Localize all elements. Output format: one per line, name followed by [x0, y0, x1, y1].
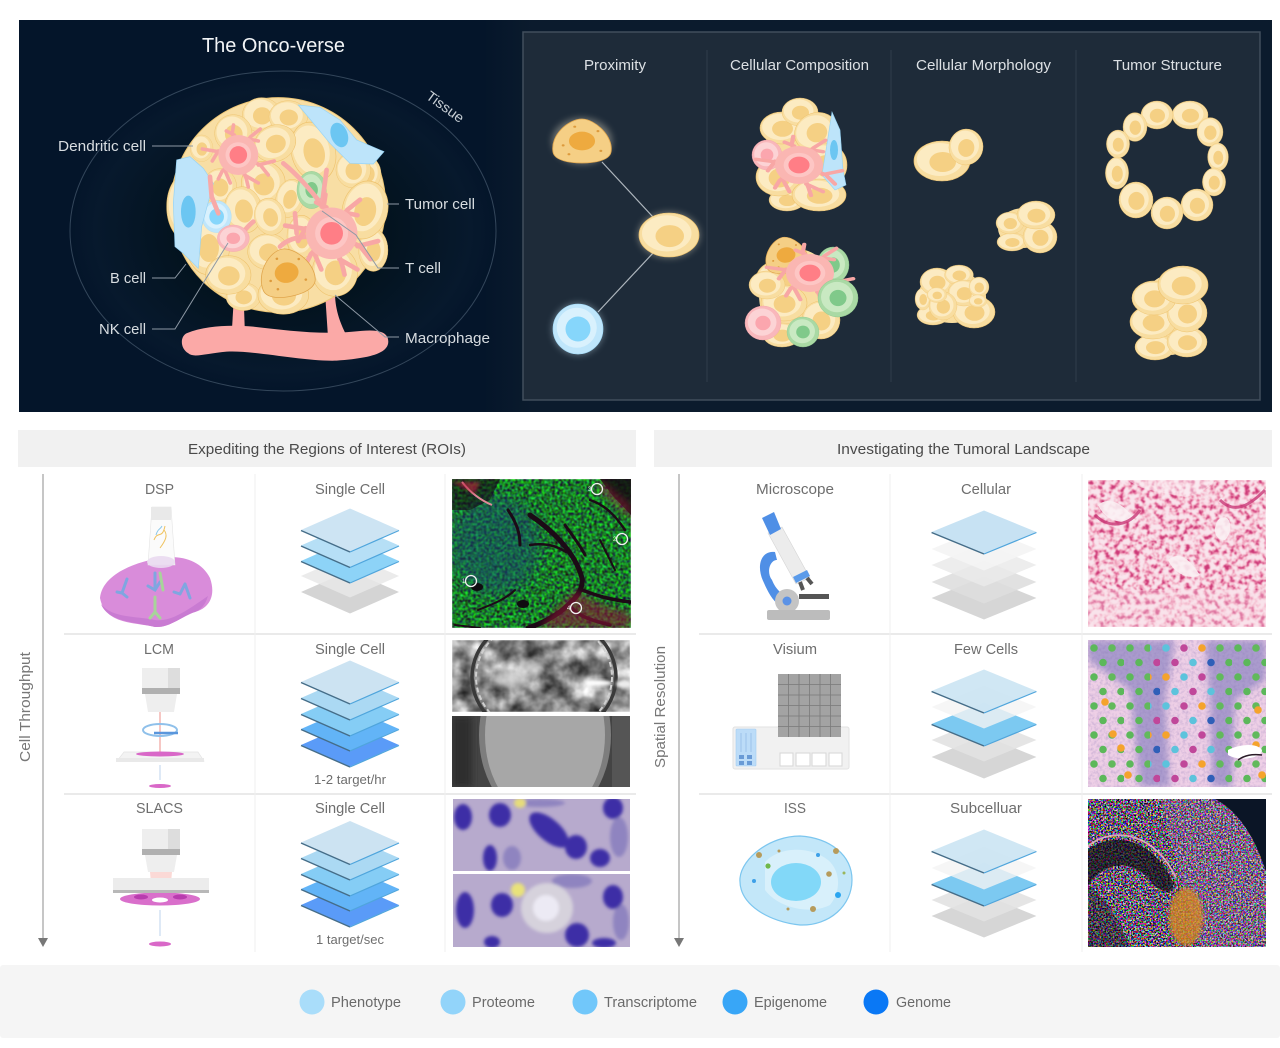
panel: spatial features: [523, 32, 1260, 400]
image: SLACS before: [453, 797, 630, 871]
section heading: landscape: Investigating the Tumoral Landscape: [837, 441, 1090, 458]
legend: genome: Genome: [896, 994, 951, 1011]
feature headings: Proximity: [584, 58, 647, 74]
column labels: 1 target/sec: [316, 932, 384, 947]
icon: LCM instrument: [116, 668, 204, 788]
illustration: tumor with blood vessel: [167, 98, 394, 361]
layer stack: Few Cells: [932, 670, 1036, 778]
column labels: SLACS: [136, 801, 183, 817]
column labels: Single Cell: [315, 642, 385, 658]
column labels: [136, 482, 1022, 947]
feature headings: Cellular Composition: [730, 58, 869, 74]
column labels: Cellular: [961, 482, 1011, 498]
column labels: Single Cell: [315, 801, 385, 817]
layer stack: DSP: [301, 508, 399, 614]
fibroblasts: [173, 105, 384, 268]
column labels: 1-2 target/hr: [314, 772, 387, 787]
cell labels: [58, 138, 490, 347]
image: ISS spatial map: [1088, 799, 1266, 947]
cell labels: Tumor cell: [405, 196, 475, 213]
tissue label: Tissue: [423, 87, 468, 126]
cellular composition cluster 2: [745, 234, 858, 347]
connecting tentacles: [210, 163, 327, 247]
tumor structure ring: [1105, 101, 1228, 229]
panel: The Onco-verse dark banner: [19, 20, 1272, 412]
column labels: Visium: [773, 642, 817, 658]
tumor structure cluster: [1130, 266, 1208, 360]
title: The Onco-verse: [202, 35, 345, 57]
section heading: landscape: [654, 430, 1272, 467]
image: DSP fluorescence: 1: [462, 579, 466, 585]
legend: transcriptome: [572, 990, 697, 1014]
legend: epigenome: [722, 990, 827, 1014]
fibroblast nuclei: [181, 120, 351, 228]
dendritic cell 2: [285, 195, 378, 275]
cell labels: Macrophage: [405, 330, 490, 347]
feature headings: [584, 58, 1222, 74]
NK cell: [217, 225, 249, 252]
legend: phenotype: Phenotype: [331, 994, 401, 1011]
layer stack: Subcellular: [932, 830, 1036, 938]
legend: genome: [864, 990, 951, 1014]
macrophage: [255, 244, 318, 302]
cellular morphology clusters: [914, 126, 1057, 328]
icon: DSP tissue and probe: [100, 507, 212, 627]
icon: Visium instrument: [733, 674, 849, 769]
column labels: Subcelluar: [950, 801, 1022, 817]
column labels: DSP: [145, 482, 174, 498]
icon: ISS cell: [740, 836, 852, 925]
feature headings: Cellular Morphology: [916, 58, 1052, 74]
image: DSP fluorescence: 3: [588, 487, 592, 493]
cell labels: B cell: [110, 270, 146, 287]
column labels: Microscope: [756, 482, 834, 498]
legend: epigenome: Epigenome: [754, 994, 827, 1011]
legend: proteome: [440, 990, 535, 1014]
column labels: LCM: [144, 642, 174, 658]
layer stack: SLACS: [301, 821, 399, 927]
image: H&E stain: [1088, 480, 1266, 627]
dendritic cell 1: [202, 125, 274, 187]
proximity diagram: [552, 118, 700, 355]
legend: proteome: Proteome: [472, 994, 535, 1011]
leader lines: [152, 146, 399, 337]
image: DSP fluorescence: 4: [567, 606, 571, 612]
cell labels: Dendritic cell: [58, 138, 146, 155]
image: LCM after: [452, 716, 630, 787]
image: LCM before: [452, 640, 630, 712]
icon: microscope: [760, 512, 830, 620]
axis: cell throughput: Cell Throughput: [18, 652, 34, 762]
B cell: [202, 201, 231, 233]
cell labels: T cell: [405, 260, 441, 277]
axis: spatial resolution: Spatial Resolution: [653, 646, 669, 768]
cell labels: NK cell: [99, 321, 146, 338]
column labels: Few Cells: [954, 642, 1018, 658]
legend: [0, 965, 1280, 1038]
tissue oval: [70, 71, 496, 391]
cellular composition cluster 1: [752, 98, 847, 211]
column labels: ISS: [784, 801, 806, 817]
tumor cell mass: [167, 98, 394, 314]
column labels: Single Cell: [315, 482, 385, 498]
layer stack: Cellular: [932, 510, 1036, 620]
image: Visium spots: [1088, 640, 1266, 787]
image: SLACS after: [453, 874, 630, 948]
axis: spatial resolution: [653, 474, 684, 947]
icon: SLACS instrument: [113, 829, 209, 946]
image: DSP fluorescence: [450, 479, 631, 628]
section heading: ROIs: Expediting the Regions of Interest (ROIs): [188, 441, 466, 458]
legend: transcriptome: Transcriptome: [604, 994, 697, 1011]
blood vessel: [182, 292, 388, 361]
section heading: ROIs: [18, 430, 636, 467]
axis: cell throughput: [18, 474, 48, 947]
legend: phenotype: [300, 990, 401, 1014]
green cell: [297, 171, 326, 209]
image: DSP fluorescence: 2: [613, 537, 617, 543]
feature headings: Tumor Structure: [1113, 58, 1222, 74]
layer stack: LCM: [301, 660, 399, 767]
